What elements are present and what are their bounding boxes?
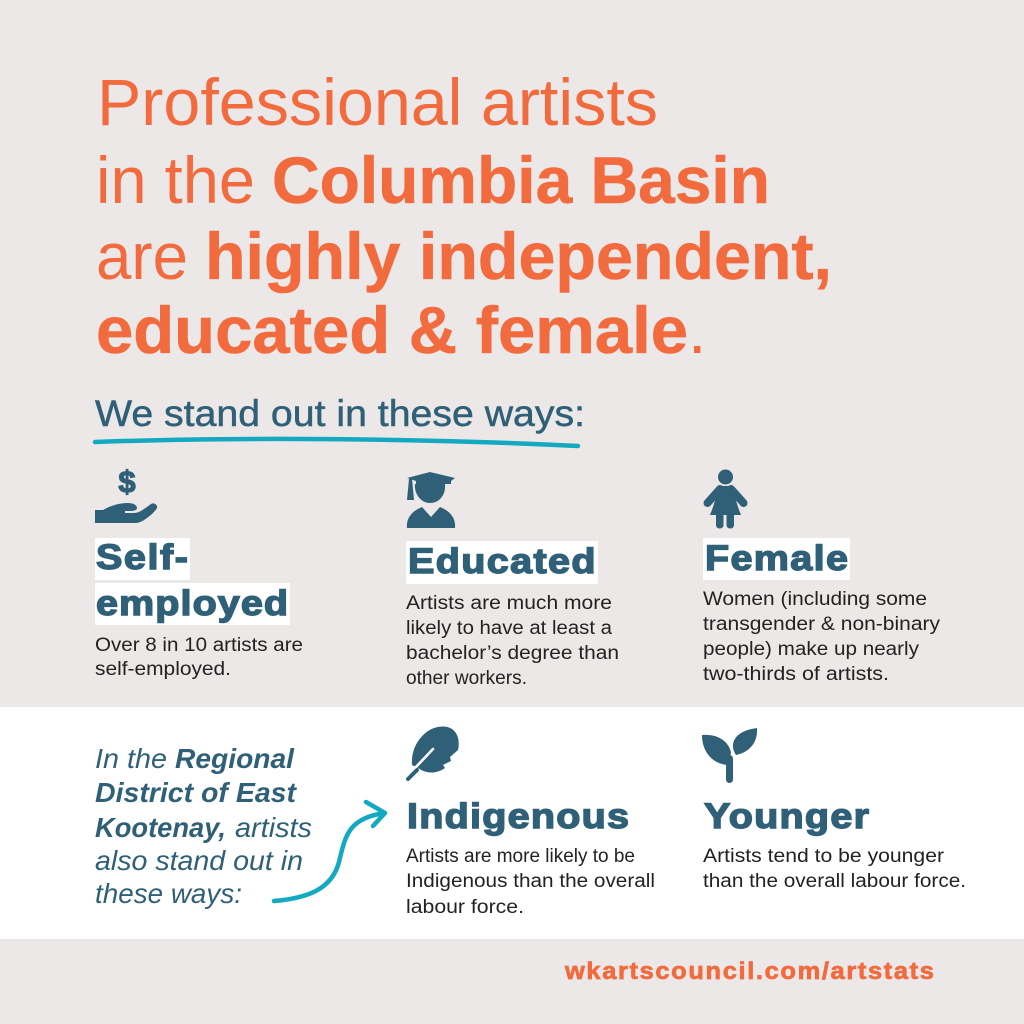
title: [96, 65, 832, 367]
body text: self-employed.: [95, 658, 231, 680]
white band: [0, 707, 1024, 939]
body text: [95, 634, 303, 680]
heading: Self-: [96, 537, 188, 576]
heading: employed: [96, 583, 288, 622]
title: highly independent,: [205, 219, 832, 293]
heading: Female: [705, 538, 848, 577]
panel: educated: [406, 472, 619, 689]
body text: Artists tend to be younger: [703, 845, 945, 867]
icon: hand with dollar: [95, 464, 157, 523]
body text: Indigenous than the overall: [406, 870, 655, 892]
heading highlight: [95, 583, 290, 625]
title: educated & female: [96, 293, 688, 367]
callout: regional district: In the: [95, 743, 167, 774]
body text: [406, 845, 655, 918]
title: in the: [96, 143, 255, 217]
body text: Women (including some: [703, 588, 927, 610]
heading: Younger: [704, 796, 869, 835]
callout: regional district: District of East: [95, 777, 298, 808]
body text: [406, 592, 619, 689]
callout: regional district: Kootenay,: [95, 812, 226, 843]
icon: sprout: [702, 728, 757, 783]
icon: graduate: [407, 472, 455, 528]
callout: regional district: Regional: [175, 743, 295, 774]
title: Professional artists: [97, 65, 658, 139]
icon: feather: [408, 727, 459, 779]
panel: younger: [702, 728, 966, 892]
body text: than the overall labour force.: [703, 870, 966, 892]
panel: indigenous: [406, 727, 655, 918]
callout: regional district: artists: [235, 812, 312, 843]
title: .: [688, 293, 706, 367]
panel: female: [703, 470, 940, 685]
subheading: We stand out in these ways:: [95, 393, 585, 434]
heading highlight: [95, 538, 190, 580]
body text: other workers.: [406, 667, 527, 689]
body text: [703, 588, 940, 685]
body text: bachelor’s degree than: [406, 642, 619, 664]
heading: Indigenous: [407, 796, 629, 835]
heading: Educated: [408, 541, 596, 580]
body text: two-thirds of artists.: [703, 663, 889, 685]
body text: likely to have at least a: [406, 617, 612, 639]
heading highlight: [406, 541, 598, 584]
icon: hand with dollar: $: [118, 464, 136, 499]
panel: self-employed: [95, 464, 303, 680]
callout: regional district: these ways:: [95, 878, 242, 909]
title: are: [96, 219, 188, 293]
icon: woman: [708, 470, 744, 528]
body text: Artists are more likely to be: [406, 845, 635, 867]
callout: regional district: also stand out in: [95, 845, 303, 876]
body text: [703, 845, 966, 892]
body text: labour force.: [406, 896, 524, 918]
footer url: wkartscouncil.com/artstats: [564, 959, 934, 985]
body text: people) make up nearly: [703, 638, 919, 660]
body text: Over 8 in 10 artists are: [95, 634, 303, 656]
title: Columbia Basin: [272, 143, 770, 217]
body text: transgender & non-binary: [703, 613, 940, 635]
arrow: [274, 802, 385, 901]
heading highlight: [703, 538, 850, 580]
callout: regional district: [95, 743, 312, 909]
body text: Artists are much more: [406, 592, 612, 614]
underline: [95, 439, 578, 446]
